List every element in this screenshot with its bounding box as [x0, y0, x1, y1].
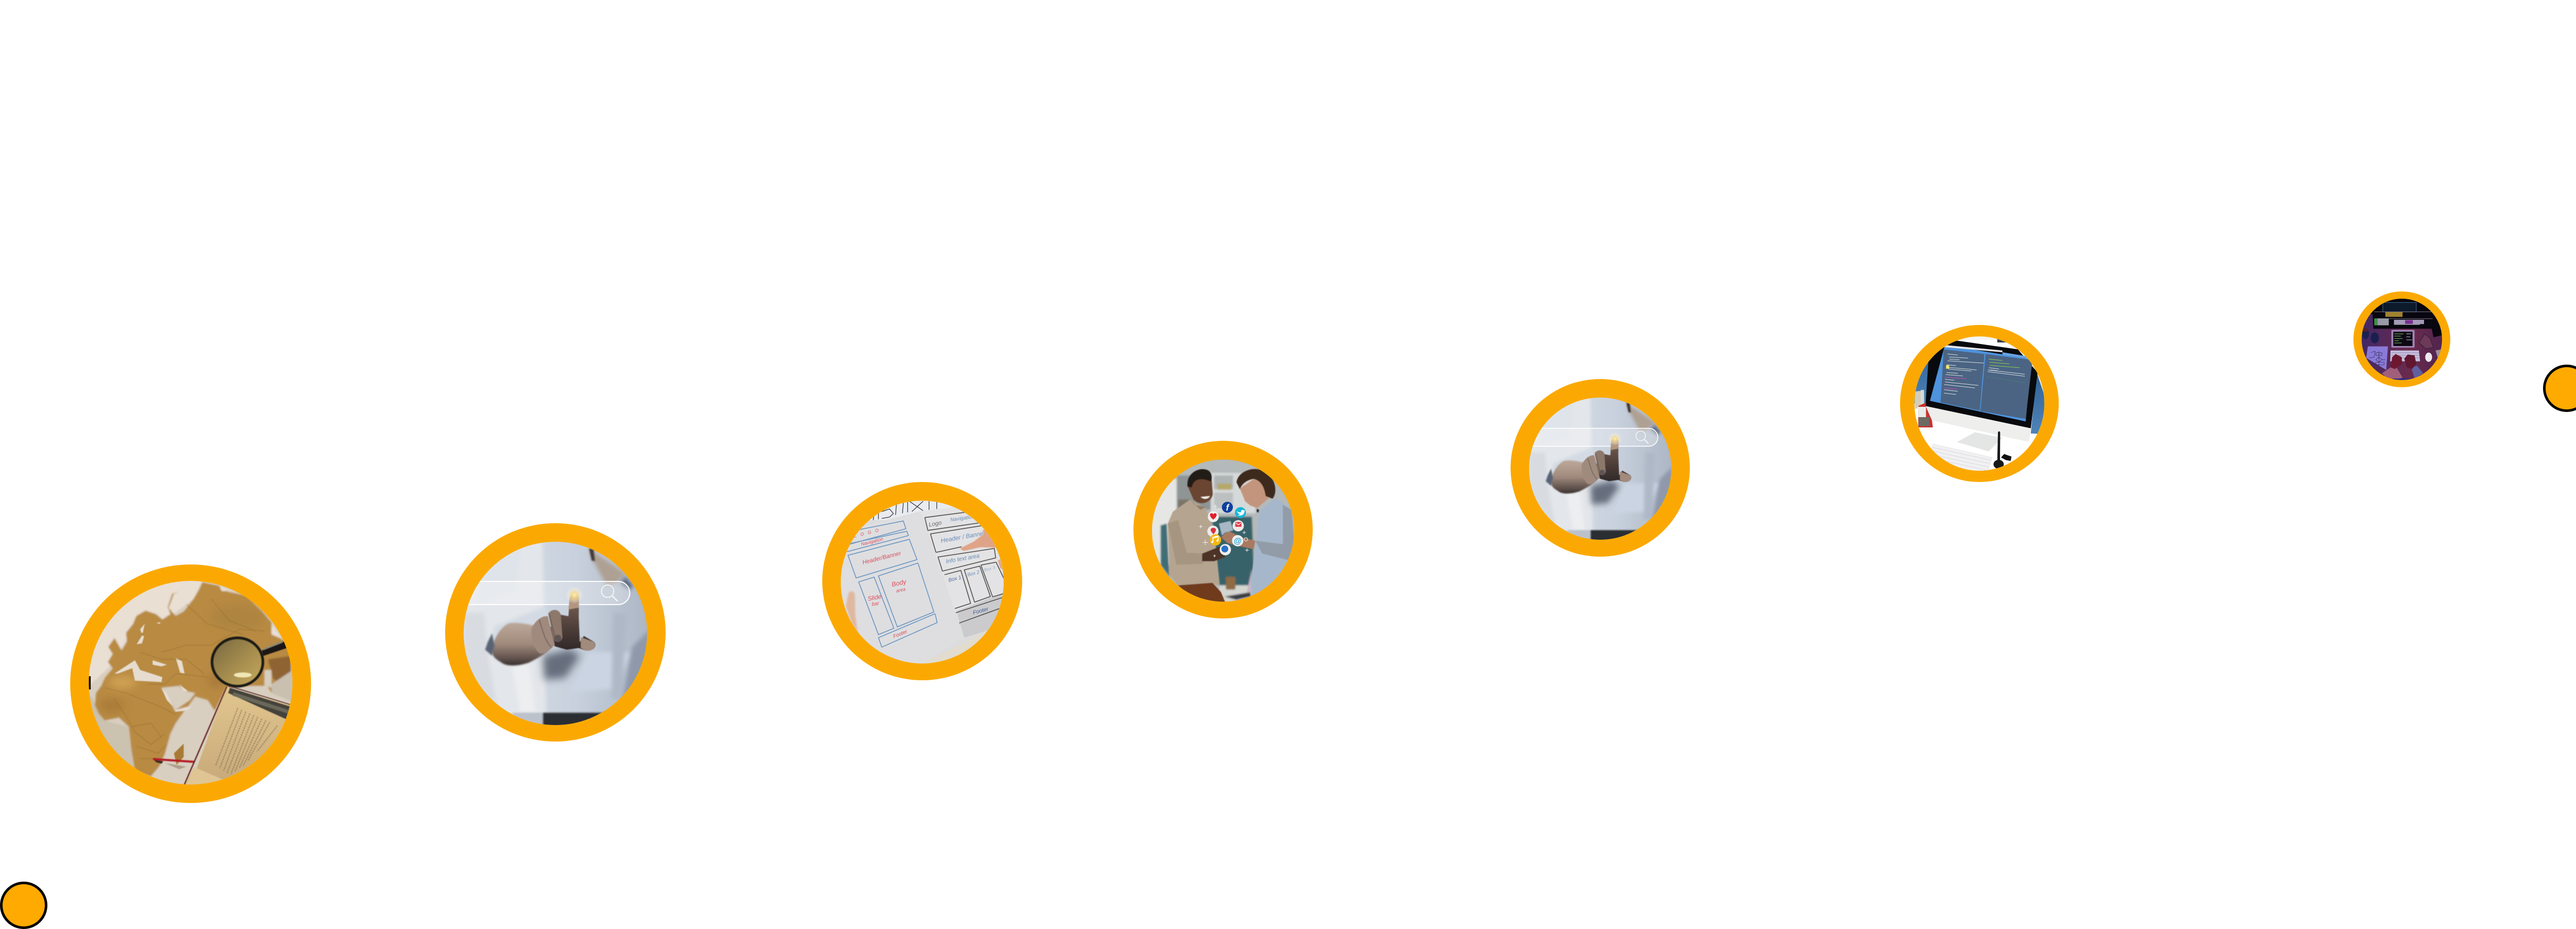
start dot: [1, 883, 46, 928]
panel: social media photo circle: [1133, 441, 1313, 618]
black object at edge: [89, 676, 91, 690]
right sheet: [921, 506, 1005, 671]
keyboard: [2390, 351, 2420, 362]
ring: [1511, 379, 1690, 557]
back sheet strip: [870, 501, 975, 520]
wireframe label: LOGO: LOGO: [853, 526, 883, 539]
keyboard: [1928, 444, 1992, 475]
mouse: [2425, 353, 2432, 362]
map base: [85, 578, 298, 789]
panel: wireframe photo circle: [822, 482, 1022, 680]
wireframe label: Navigation red: Navigation: [860, 537, 884, 547]
code lines: [1944, 354, 2025, 394]
panel: search photo circle 1: [416, 523, 666, 742]
wireframe label: bar: bar: [871, 600, 880, 608]
phone: [1219, 521, 1233, 536]
ring: [2353, 291, 2450, 387]
ring: [822, 482, 1022, 680]
icon: at sign: @: [1234, 537, 1242, 545]
hands and sleeves: [2382, 354, 2423, 382]
wireframe label: Slide bar: Slide: [867, 593, 882, 603]
wireframe label: Footer red: Footer: [892, 629, 909, 640]
photo: developer typing in neon light: [2360, 298, 2444, 382]
panel: search photo circle 2: [1492, 379, 1690, 557]
land shading: [99, 605, 264, 713]
wireframe label: Header / Banner: Header / Banner: [940, 529, 987, 544]
open book: [184, 686, 290, 787]
flowchart paper: [2366, 347, 2388, 370]
monitor: [1925, 339, 2038, 442]
icon: twitter: [1235, 507, 1246, 518]
wireframe label: Box 2: Box 2: [967, 570, 980, 577]
man right: [1221, 469, 1295, 603]
map borders and Madagascar: [105, 599, 264, 765]
wireframe label: Box 3: Box 3: [984, 565, 996, 573]
panel: map photo circle: [70, 564, 311, 803]
ribbon bookmark: [153, 758, 194, 769]
left sheet: [838, 511, 964, 671]
glass object: [2419, 334, 2433, 349]
wireframe label: Logo: Logo: [928, 520, 942, 528]
tablet: [2392, 330, 2415, 348]
wireframe label: Footer: Footer: [972, 606, 989, 616]
icon: music: [1210, 534, 1221, 545]
end dot: [2544, 366, 2576, 411]
icon: facebook: f: [1226, 502, 1230, 512]
paper base: [838, 498, 1006, 666]
photo: two men with social icons: [1150, 458, 1297, 603]
right hand: [960, 529, 1003, 570]
icon: at sign: [1232, 535, 1243, 546]
photo: hand touching search bar: [1492, 394, 1675, 543]
photo: desktop monitor with code: [1913, 335, 2047, 475]
ring: [1900, 325, 2059, 482]
highlighted code: [1946, 365, 1949, 369]
infographic canvas: [0, 291, 2576, 929]
binder clip: [2001, 454, 2011, 461]
ring: [70, 564, 311, 803]
pen and holder: [1993, 431, 2004, 469]
wireframe label: Navigation: Navigation: [950, 514, 975, 523]
wireframe label: Box 1: Box 1: [948, 575, 962, 583]
markers: [1915, 390, 1924, 408]
magnifying glass: [212, 638, 287, 686]
photo: paper wireframes: [838, 498, 1006, 671]
monitors: [2360, 298, 2444, 337]
icon: blue globe: [1219, 544, 1231, 555]
office background: [1150, 458, 1297, 603]
panel: developer at desk photo circle: [2353, 291, 2450, 387]
wall and desk: [1913, 335, 2047, 472]
wireframe label: area: area: [895, 587, 906, 594]
book edge: [2435, 349, 2442, 358]
panel: computer code photo circle: [1900, 325, 2059, 482]
wireframe label: Body area: Body: [891, 578, 907, 588]
photo: map and book: [85, 578, 298, 789]
photo: hand touching search bar: [416, 537, 653, 730]
desk: [2360, 298, 2444, 382]
left finger: [846, 591, 858, 633]
icon: facebook: [1222, 502, 1233, 513]
sparkles: [1199, 505, 1249, 557]
mugs: [2362, 328, 2379, 343]
icon: heart: [1208, 511, 1219, 522]
monitor stand: [1957, 432, 2003, 452]
wireframe label: Header/Banner red: Header/Banner: [862, 550, 902, 566]
ring: [1133, 441, 1313, 618]
icon: mail: [1232, 520, 1244, 531]
man left: [1168, 469, 1225, 603]
ring: [445, 523, 666, 742]
seas: [114, 622, 192, 712]
icon: location pin: [1207, 526, 1218, 537]
red camera object: [1918, 403, 1933, 427]
wireframe label: Info text area: Info text area: [945, 553, 980, 565]
